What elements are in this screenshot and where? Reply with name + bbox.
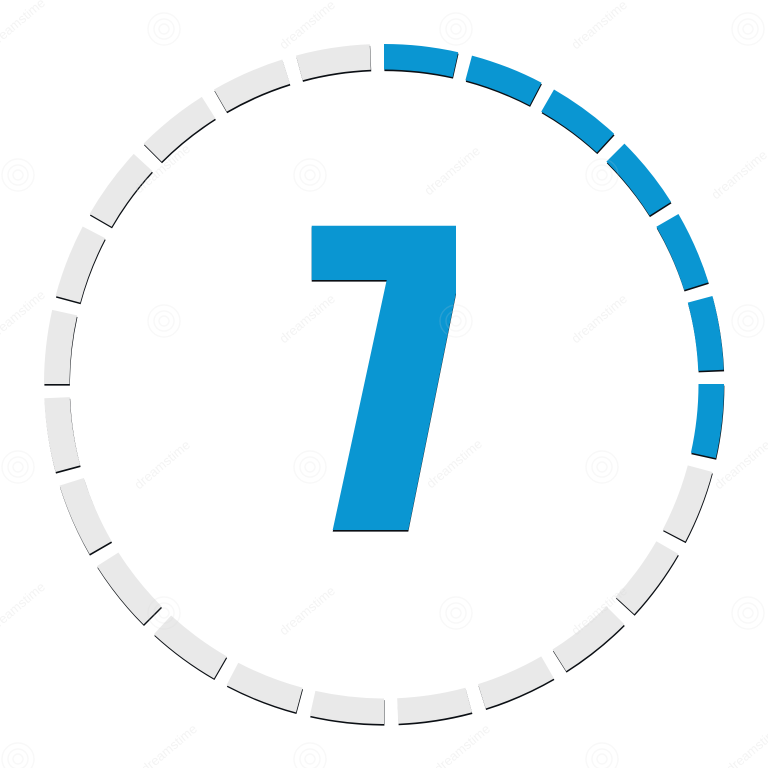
- blue segment 2: [463, 56, 544, 108]
- blue segment 3: [537, 90, 619, 157]
- gray segment 22: [144, 91, 220, 169]
- gray segment 21: [90, 150, 156, 232]
- gray segment 20: [56, 224, 107, 306]
- blue segment 6: [680, 296, 732, 378]
- gray segment 23: [214, 52, 295, 120]
- watermark: dreamstime: [423, 436, 485, 491]
- blue segment 4: [601, 144, 677, 221]
- watermark: dreamstime: [568, 583, 630, 638]
- gray segment 18: [36, 392, 88, 474]
- watermark: dreamstime: [568, 291, 630, 346]
- blue segment 7: [691, 384, 724, 460]
- watermark: dreamstime: [276, 583, 338, 638]
- gray segment 9: [613, 537, 679, 620]
- blue segment 1: [384, 44, 459, 79]
- gray segment 15: [150, 613, 231, 680]
- watermark: dreamstime: [131, 141, 193, 196]
- gray segment 12: [392, 680, 472, 733]
- central numeral 7: [312, 226, 456, 532]
- blue segment 5: [650, 214, 716, 296]
- watermark: dreamstime: [276, 291, 338, 346]
- gray segment 24: [296, 36, 377, 89]
- gray segment 10: [549, 601, 625, 678]
- gray segment 11: [473, 650, 554, 717]
- gray segment 14: [224, 661, 305, 714]
- watermark: dreamstime: [131, 437, 193, 492]
- gray segment 13: [310, 691, 384, 726]
- gray segment 8: [661, 463, 713, 545]
- gray segment 17: [52, 473, 119, 556]
- watermark: dreamstime: [421, 143, 483, 198]
- gray segment 19: [44, 310, 77, 386]
- gray segment 16: [91, 549, 167, 626]
